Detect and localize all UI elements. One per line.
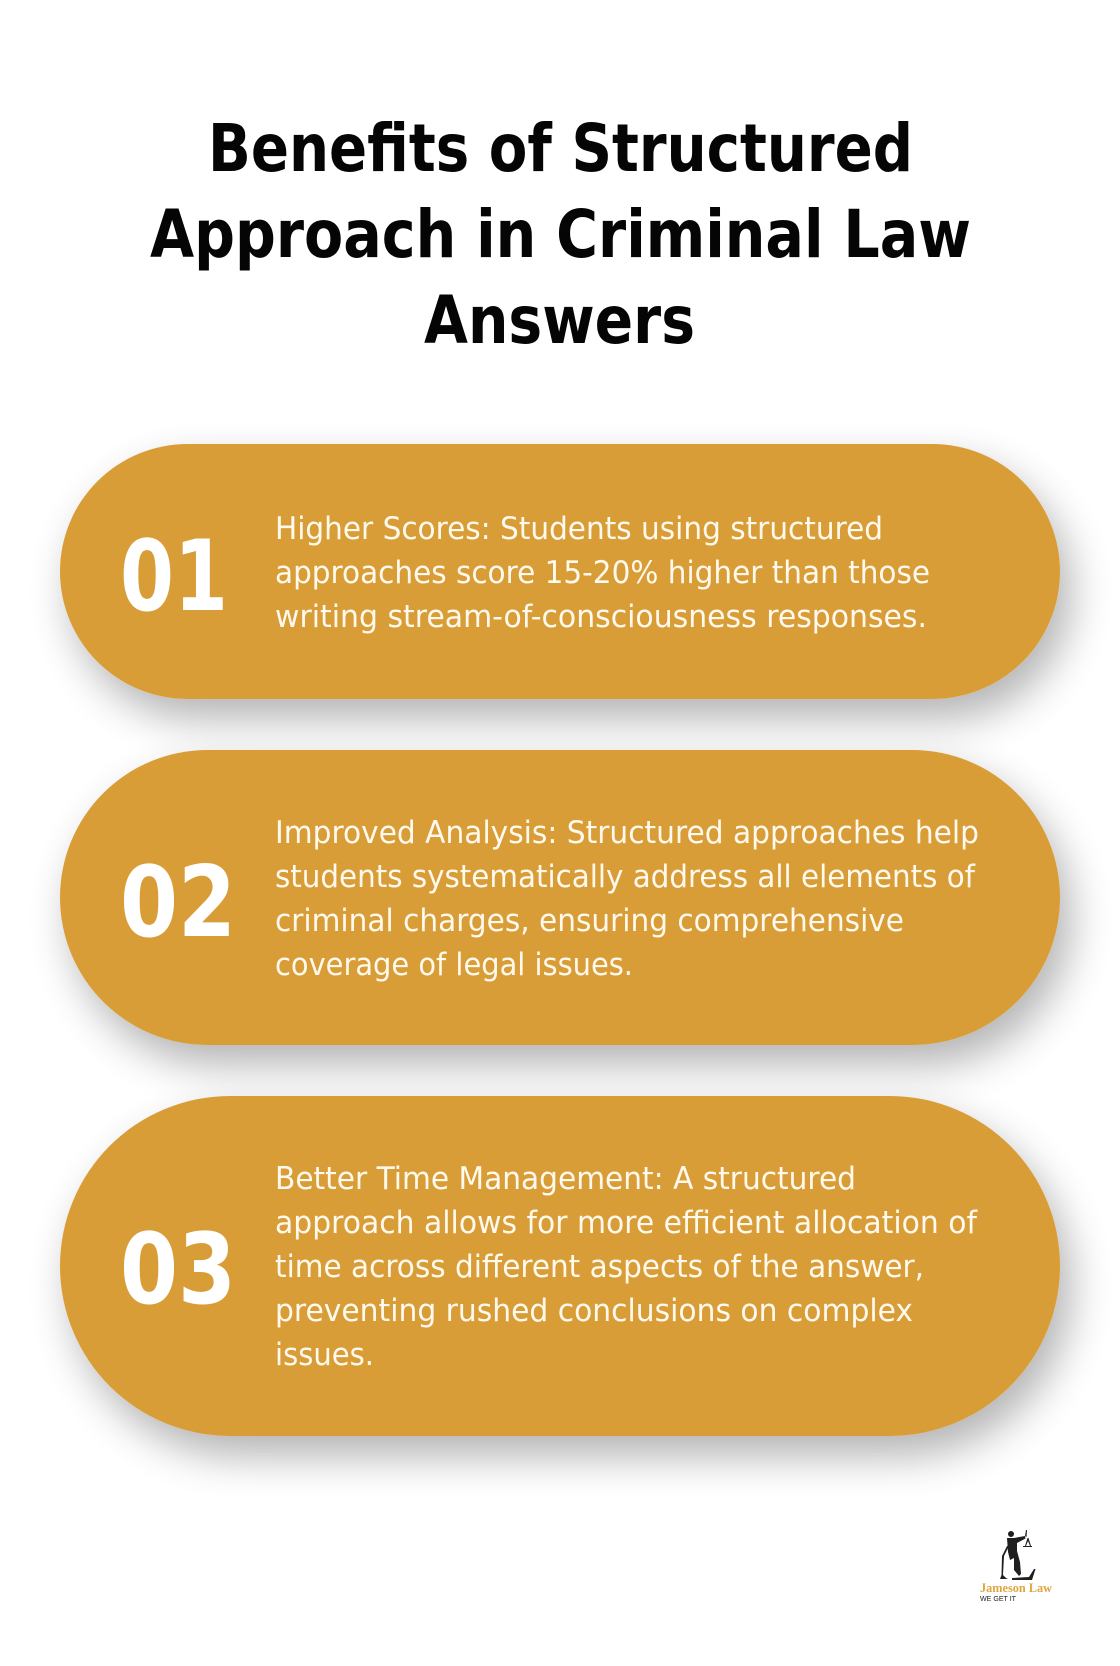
icon: lady justice	[1000, 1530, 1036, 1580]
description text: approach allows for more efficient allocation of	[275, 1205, 978, 1241]
company name: Jameson Law	[980, 1581, 1052, 1595]
logo: Jameson Law	[980, 1530, 1052, 1603]
description text: time across different aspects of the answer,	[275, 1249, 924, 1285]
tagline: WE GET IT	[980, 1594, 1016, 1603]
pill background	[60, 444, 1060, 699]
description text: writing stream-of-consciousness responses.	[275, 599, 927, 635]
title	[150, 110, 971, 359]
panel: higher scores	[60, 444, 1060, 699]
title: Benefits of Structured	[208, 110, 913, 187]
description text: Better Time Management: A structured	[275, 1161, 856, 1197]
description text	[275, 815, 979, 983]
pill background	[60, 750, 1060, 1045]
description text: preventing rushed conclusions on complex	[275, 1293, 913, 1329]
description text: criminal charges, ensuring comprehensive	[275, 903, 904, 939]
number 01: 01	[120, 520, 228, 634]
description text: coverage of legal issues.	[275, 947, 633, 983]
description text: students systematically address all elements of	[275, 859, 976, 895]
description text: issues.	[275, 1337, 374, 1373]
title: Approach in Criminal Law	[150, 196, 971, 273]
panel: better time management	[60, 1096, 1060, 1436]
description text: Improved Analysis: Structured approaches help	[275, 815, 979, 851]
pill background	[60, 1096, 1060, 1436]
description text	[275, 511, 930, 635]
description text	[275, 1161, 978, 1373]
description text: approaches score 15-20% higher than those	[275, 555, 930, 591]
number 02: 02	[120, 846, 236, 960]
panel: improved analysis	[60, 750, 1060, 1045]
title: Answers	[424, 282, 695, 359]
number 03: 03	[120, 1213, 236, 1327]
description text: Higher Scores: Students using structured	[275, 511, 883, 547]
